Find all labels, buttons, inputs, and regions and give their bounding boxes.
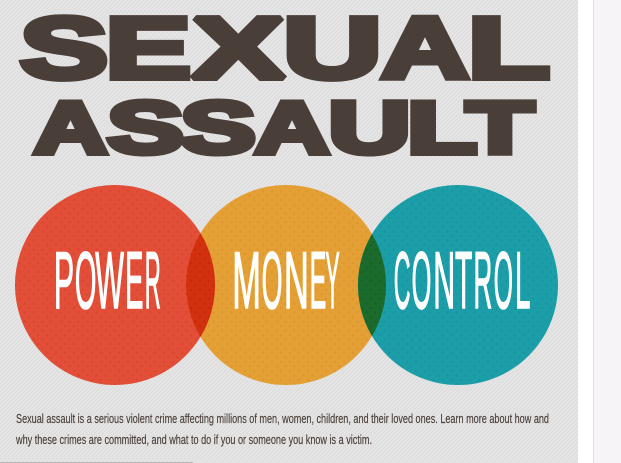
label: POWER: W xyxy=(95,236,124,326)
label: MONEY: N xyxy=(284,236,309,326)
circle: power xyxy=(15,185,215,385)
overlap: power and money xyxy=(186,233,215,337)
label: MONEY: E xyxy=(310,236,326,326)
title line: SEXUAL: S xyxy=(20,0,108,97)
intro line 2: why these crimes are committed, and what to do if you or someone you know is a victim. xyxy=(15,433,372,447)
venn diagram xyxy=(15,185,558,385)
venn diagram: L xyxy=(515,236,530,326)
page margin xyxy=(578,0,621,463)
label: MONEY: M xyxy=(232,236,261,326)
title line: SEXUAL: U xyxy=(283,0,382,97)
title line: SEXUAL: E xyxy=(105,0,191,97)
label: CONTROL: T xyxy=(455,236,472,326)
overlap: money and control xyxy=(358,234,386,336)
label: CONTROL: R xyxy=(474,236,492,326)
sidebar strip xyxy=(594,0,621,463)
title line: ASSAULT: S xyxy=(180,88,256,169)
title line: SEXUAL: X xyxy=(192,0,284,97)
label: CONTROL: N xyxy=(433,236,455,326)
venn diagram: R xyxy=(145,236,161,326)
title line: ASSAULT: L xyxy=(407,88,477,169)
label: CONTROL: C xyxy=(394,236,410,326)
label: CONTROL: O xyxy=(494,236,513,326)
title line: ASSAULT: A xyxy=(34,88,107,169)
label: POWER: E xyxy=(125,236,143,326)
title xyxy=(20,0,550,169)
label: POWER: P xyxy=(54,236,74,326)
bottom rule xyxy=(0,462,193,463)
title line: ASSAULT: U xyxy=(329,88,410,169)
label: CONTROL: O xyxy=(412,236,431,326)
label: MONEY: O xyxy=(262,236,282,326)
intro text xyxy=(15,412,549,447)
title line: ASSAULT: T xyxy=(466,88,534,169)
label: POWER: O xyxy=(75,236,96,326)
venn diagram: Y xyxy=(325,236,340,326)
title line: ASSAULT: A xyxy=(255,88,329,169)
title line: ASSAULT: S xyxy=(107,88,184,169)
title line: SEXUAL: L xyxy=(468,0,550,97)
title line: SEXUAL: A xyxy=(381,0,469,97)
circle: money xyxy=(186,185,386,385)
circle: control xyxy=(358,185,558,385)
